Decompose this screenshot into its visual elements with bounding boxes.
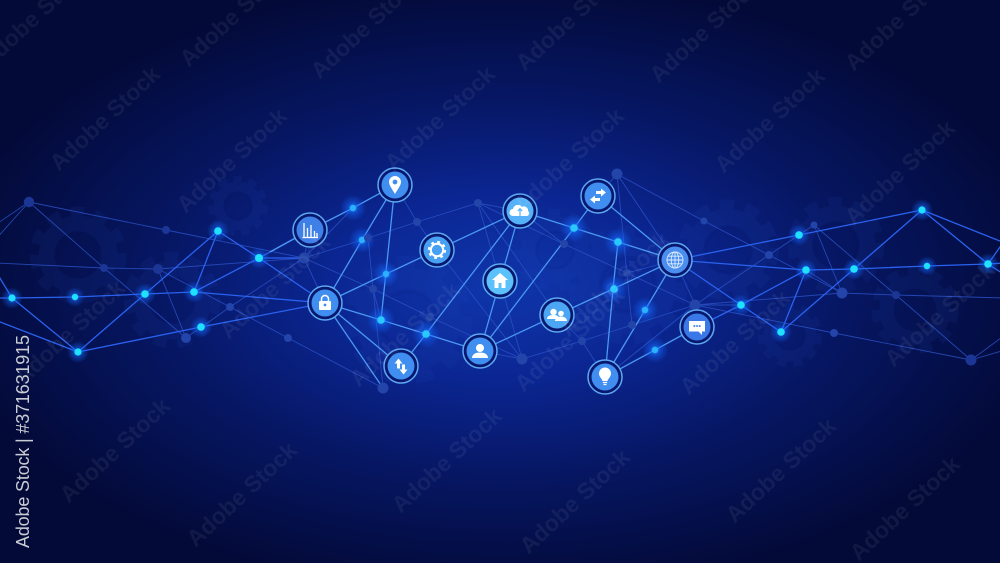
watermarks: Adobe Stock: [9, 275, 130, 390]
watermarks: Adobe Stock: [508, 103, 629, 218]
icon: cloud upload: [503, 194, 537, 228]
icon: settings gear: [420, 233, 454, 267]
watermarks: Adobe Stock: [554, 227, 675, 342]
watermarks: Adobe Stock: [386, 403, 507, 518]
icon: exchange arrows: [581, 179, 615, 213]
icon: users: [540, 298, 574, 332]
watermarks: Adobe Stock: [171, 103, 292, 218]
stock id text: Adobe Stock | #371631915: [13, 335, 33, 548]
icon: light bulb: [588, 360, 622, 394]
watermarks: Adobe Stock: [379, 61, 500, 176]
icon: person: [463, 334, 497, 368]
icon: padlock: [308, 286, 342, 320]
dim nodes: [24, 168, 977, 394]
watermarks: Adobe Stock: [181, 437, 302, 552]
watermarks: Adobe Stock: [844, 451, 965, 563]
side bright connection lines: [0, 210, 1000, 352]
icon: up and down arrows: [384, 349, 418, 383]
watermarks: Adobe Stock: [709, 63, 830, 178]
watermarks: Adobe Stock: [344, 277, 465, 392]
watermarks: Adobe Stock: [879, 257, 1000, 372]
bright nodes: [1, 195, 999, 363]
watermarks: Adobe Stock: [839, 115, 960, 230]
watermarks: Adobe Stock: [214, 229, 335, 344]
icon: globe: [658, 243, 692, 277]
central connection lines: [270, 185, 697, 388]
watermarks: Adobe Stock: [674, 285, 795, 400]
watermarks: Adobe Stock: [509, 282, 630, 397]
icon: home: [483, 264, 517, 298]
watermarks: Adobe Stock: [54, 393, 175, 508]
watermarks: Adobe Stock: [720, 413, 841, 528]
faint gears: [35, 179, 954, 377]
watermarks: Adobe Stock: [514, 444, 635, 559]
icon: location pin: [378, 168, 412, 202]
icon: chat bubble: [680, 310, 714, 344]
watermarks: Adobe Stock: [44, 61, 165, 176]
icon: bar chart: [293, 213, 327, 247]
dim connection lines: [0, 174, 1000, 388]
